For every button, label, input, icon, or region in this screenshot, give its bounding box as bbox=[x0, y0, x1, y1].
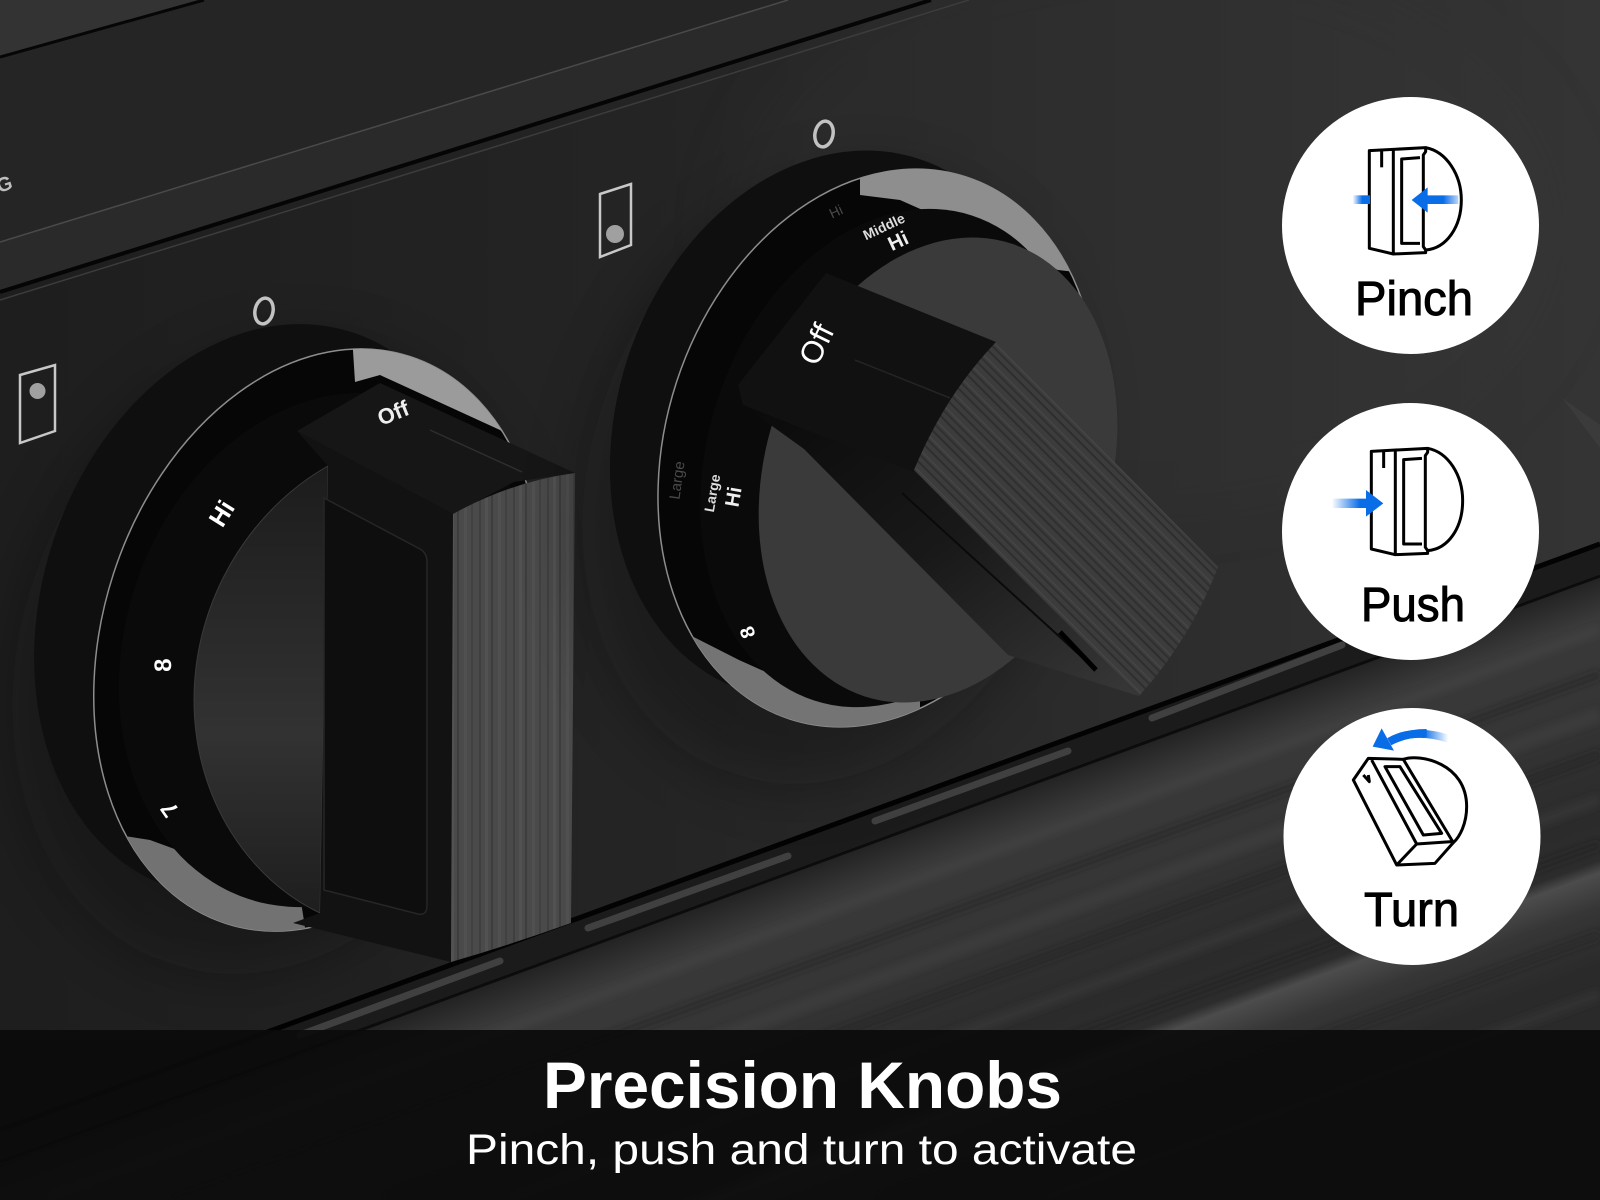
right knob handle top: Off bbox=[792, 318, 841, 370]
left knob dial band: Hi bbox=[204, 496, 241, 532]
right indicator ring bbox=[812, 119, 836, 149]
right knob ribbed side bbox=[914, 342, 1218, 696]
right knob dial band: Hi bbox=[885, 227, 912, 256]
right knob dial band: Hi bbox=[722, 485, 747, 509]
left knob ribbed side bbox=[451, 473, 575, 962]
oven door and trim strip bbox=[266, 542, 1600, 1030]
callout: push bbox=[1282, 403, 1539, 660]
left knob handle top: Off bbox=[374, 395, 413, 431]
callout: turn bbox=[1284, 708, 1540, 965]
left knob dial band bbox=[54, 337, 606, 963]
knob shadow bbox=[506, 111, 1154, 849]
subtitle: Pinch, push and turn to activate bbox=[466, 1126, 1137, 1174]
right knob dial band bbox=[638, 158, 1148, 758]
right knob dial band: Middle bbox=[860, 210, 908, 243]
caption band bbox=[0, 1030, 1600, 1200]
right knob dial band: Large bbox=[701, 473, 723, 513]
label: turn: Turn bbox=[1364, 884, 1459, 937]
left indicator ring bbox=[252, 296, 276, 326]
indicator marks bbox=[20, 119, 836, 443]
right knob handle underside bbox=[743, 405, 1139, 696]
left knob dial band: 8 bbox=[150, 658, 177, 672]
right knob face bbox=[701, 190, 1175, 750]
left knob housing bbox=[0, 264, 561, 956]
left knob handle front bbox=[293, 431, 453, 962]
right knob dial band: 8 bbox=[736, 623, 761, 641]
right burner icon bbox=[600, 184, 631, 257]
label: push: Push bbox=[1361, 579, 1465, 632]
title: Precision Knobs bbox=[543, 1048, 1062, 1122]
right knob ring: Hi bbox=[827, 201, 845, 222]
label: pinch: Pinch bbox=[1355, 273, 1473, 326]
right knob bbox=[567, 150, 1218, 744]
icon: pinch bbox=[1353, 148, 1461, 254]
callout: pinch bbox=[1282, 97, 1539, 354]
left knob handle top bbox=[297, 383, 575, 514]
icon: turn bbox=[1353, 728, 1467, 865]
left knob dial band: 7 bbox=[155, 797, 184, 822]
knob shadow bbox=[0, 278, 607, 1042]
left knob bbox=[34, 324, 575, 962]
right knob ring bbox=[657, 168, 1082, 728]
right knob handle top bbox=[738, 273, 996, 472]
right knob housing bbox=[541, 92, 1123, 758]
left knob ring bbox=[93, 348, 528, 932]
right knob ring: Large bbox=[666, 460, 689, 501]
left knob face bbox=[194, 466, 328, 913]
left burner icon bbox=[20, 365, 55, 443]
icon: push bbox=[1332, 448, 1463, 555]
